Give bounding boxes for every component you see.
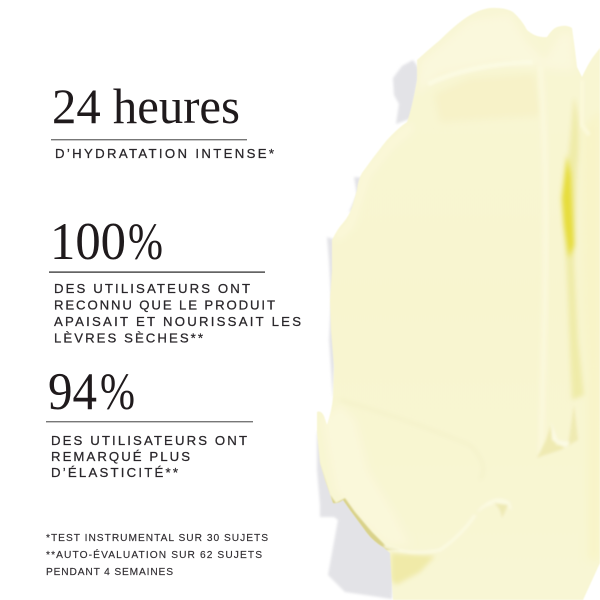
crease right (537, 405, 578, 458)
footnotes: **AUTO-ÉVALUATION SUR 62 SUJETS (46, 548, 262, 561)
stat: 94%: 94 (48, 363, 97, 421)
edge under shading (324, 475, 397, 551)
label: hydration: D’HYDRATATION INTENSE* (55, 146, 274, 161)
left edge highlight (336, 126, 412, 238)
text: 94% description: DES UTILISATEURS ONT (51, 433, 247, 448)
crest at flap (480, 498, 511, 510)
yellow streak (562, 155, 574, 258)
fold highlight (580, 118, 590, 136)
stat: 100%: 100 (50, 213, 126, 271)
divider 1 (51, 139, 247, 140)
text: 100% description (54, 281, 301, 346)
stat: 94% (48, 363, 135, 421)
stat: 94%: % (100, 364, 135, 421)
footnotes (46, 533, 268, 578)
footnotes: *TEST INSTRUMENTAL SUR 30 SUJETS (46, 533, 268, 544)
top ridge (428, 62, 533, 84)
stat: 100%: % (128, 214, 163, 271)
right strip (586, 125, 598, 556)
divider 3 (46, 421, 253, 422)
flap shadow (391, 553, 435, 585)
footnotes: PENDANT 4 SEMAINES (46, 567, 173, 578)
flap edge (384, 515, 475, 552)
divider 2 (49, 272, 265, 273)
fold shadow (563, 96, 584, 400)
product shadow (317, 60, 420, 599)
text: 100% description: LÈVRES SÈCHES** (54, 330, 203, 346)
heading: 24 heures: 24 heures (52, 78, 240, 134)
text: 100% description: APAISAIT ET NOURISSAIT LES (54, 314, 301, 329)
text: 94% description: D’ÉLASTICITÉ** (51, 465, 178, 480)
text: 94% description (51, 433, 247, 480)
inner soft crease (340, 400, 483, 480)
vertical ridge (540, 66, 546, 455)
text: 100% description: DES UTILISATEURS ONT (54, 281, 250, 296)
product: cream swatch (300, 0, 600, 600)
text: 94% description: REMARQUÉ PLUS (51, 449, 190, 464)
lower left texture (328, 414, 362, 468)
recessed well (440, 78, 536, 118)
text: 100% description: RECONNU QUE LE PRODUIT (54, 298, 275, 312)
top lobe highlight (423, 34, 566, 81)
